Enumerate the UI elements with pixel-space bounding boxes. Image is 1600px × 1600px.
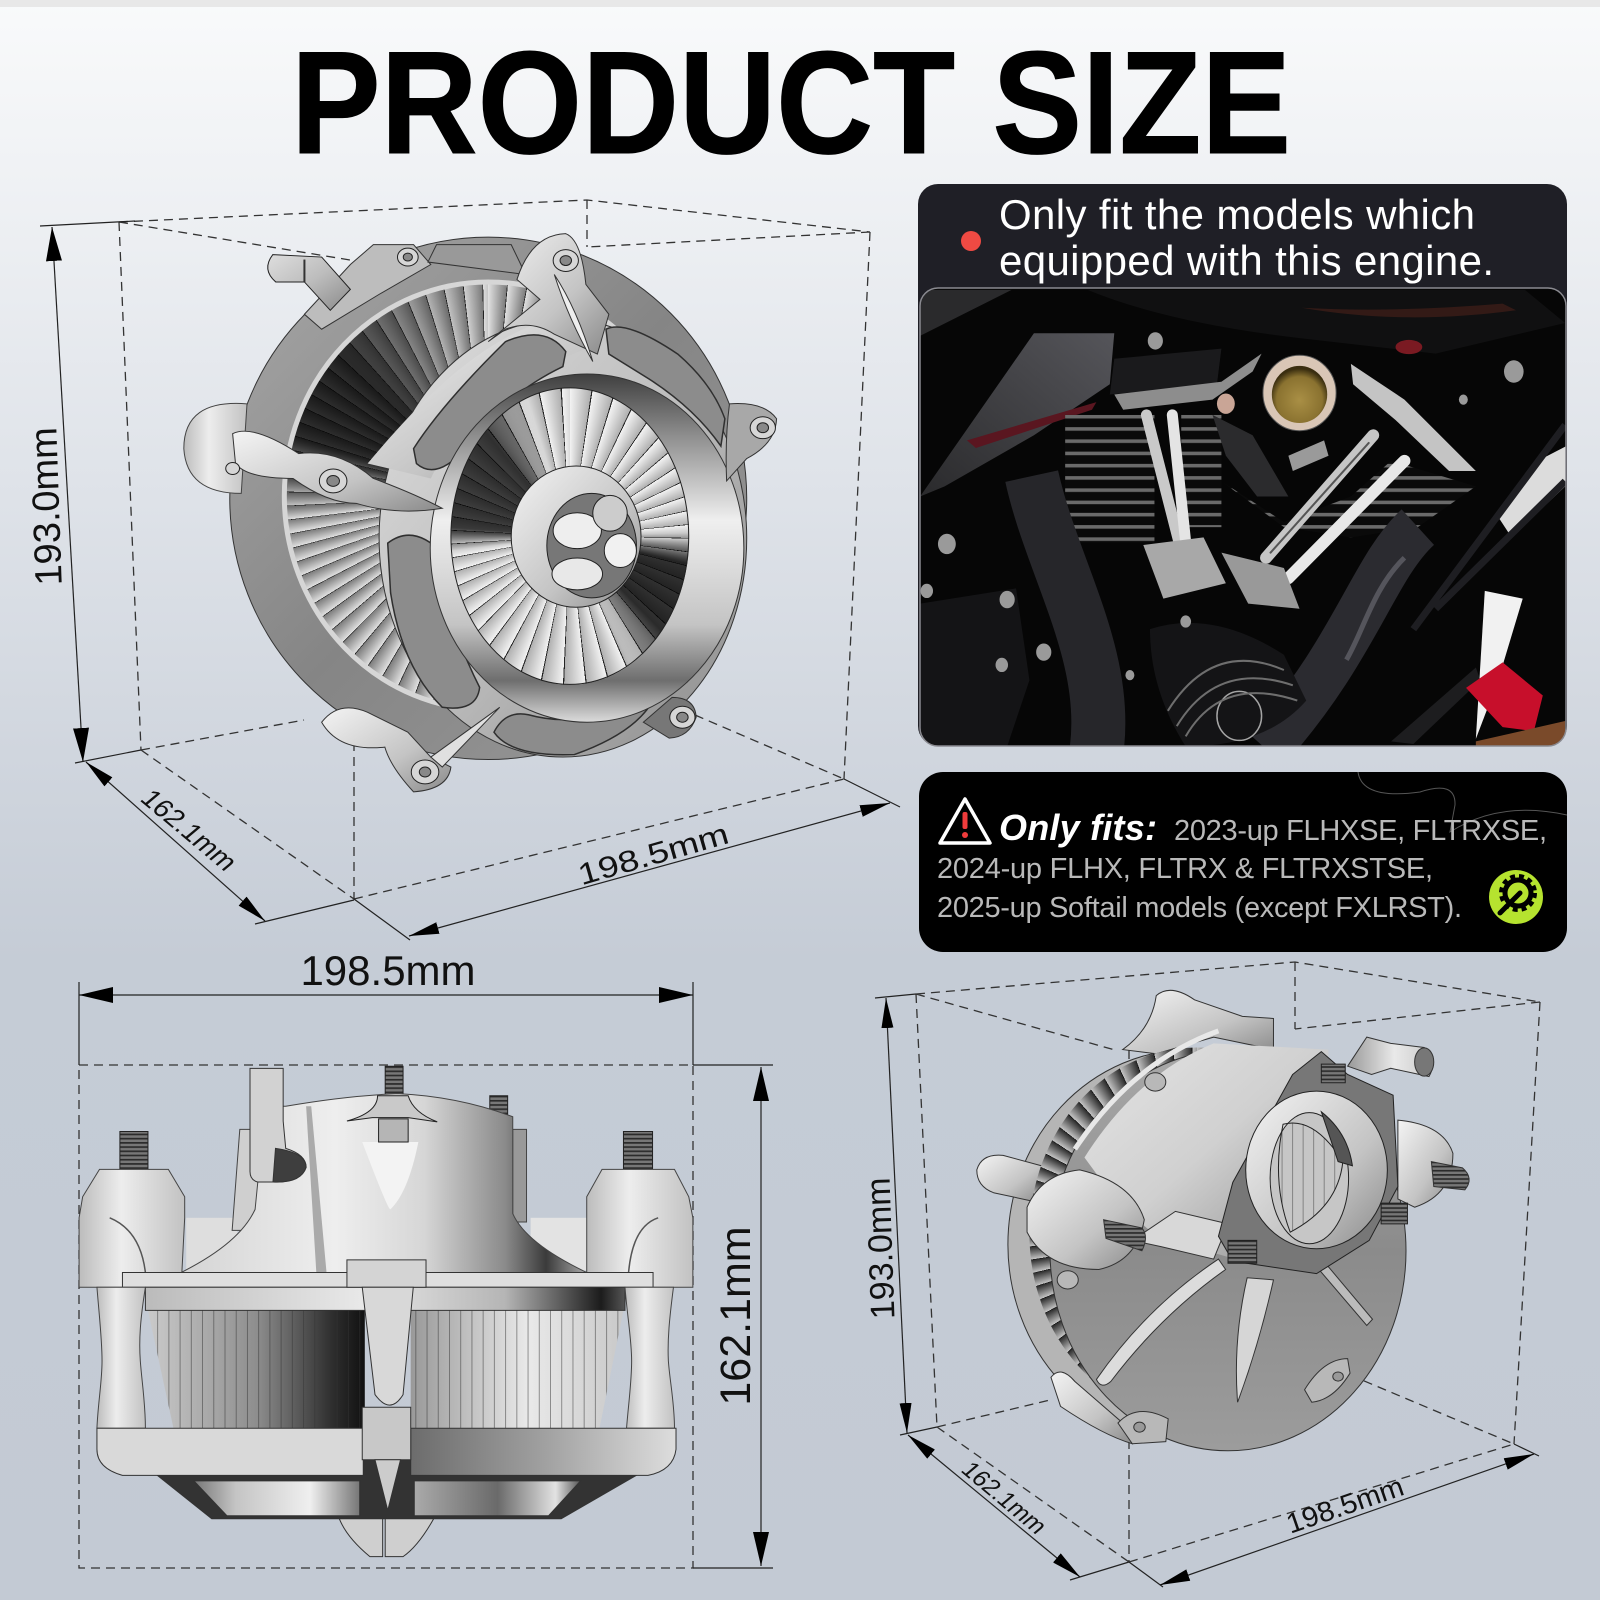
- compatible models text: [937, 815, 1547, 924]
- mounting posts: [79, 1169, 693, 1287]
- dimension: width 198.5mm: 198.5mm: [300, 947, 476, 994]
- dimension: depth 162.1mm: 162.1mm: [955, 1457, 1053, 1539]
- filter fins arc: [1029, 1048, 1364, 1421]
- diagram: rear perspective view: [860, 962, 1540, 1587]
- dimension: height 193.0mm: [860, 998, 907, 1433]
- left boss: [1027, 1170, 1145, 1269]
- icon: green gear and wrench: [1489, 870, 1543, 924]
- dimension: height 193.0mm: 193.0mm: [860, 1177, 902, 1320]
- bolts: [226, 248, 775, 784]
- hose barb: [268, 255, 350, 310]
- hose barb: [1348, 1037, 1434, 1077]
- label: only fits: Only fits:: [999, 807, 1157, 848]
- icon: warning triangle: [940, 799, 990, 843]
- dimension: depth 162.1mm: [86, 762, 265, 921]
- dome: [1084, 1043, 1328, 1257]
- bright ring: [430, 374, 744, 722]
- slot pockets: [388, 327, 739, 755]
- dimension: width 198.5mm: 198.5mm: [1282, 1471, 1408, 1540]
- dimension: depth 162.1mm: 162.1mm: [712, 1226, 760, 1406]
- engine photo: [920, 288, 1567, 752]
- product: air cleaner rear view: [977, 990, 1469, 1451]
- dimension: width 198.5mm: 198.5mm: [574, 818, 732, 892]
- dimension: width 198.5mm: [409, 803, 890, 936]
- dimension box: dashed cube: [40, 200, 900, 940]
- note text: [999, 191, 1494, 284]
- centre hub: [511, 466, 641, 607]
- product: air cleaner side view: [79, 1066, 693, 1557]
- panel: engine note with photo: [918, 184, 1567, 752]
- compatible models text: 2025-up Softail models (except FXLRST).: [937, 892, 1462, 924]
- mounting bumps: [1057, 1073, 1350, 1444]
- red foot peg: [1466, 662, 1543, 731]
- flange studs: [1228, 1064, 1407, 1263]
- note text: equipped with this engine.: [999, 237, 1494, 284]
- panel: only fits card: [919, 772, 1567, 952]
- dimension box: dashed cube: [875, 962, 1540, 1587]
- right boss: [1398, 1120, 1469, 1207]
- product: air cleaner front view: [184, 234, 777, 792]
- filter element: [148, 1310, 623, 1428]
- dimension: width 198.5mm: [1160, 1454, 1534, 1585]
- front plate: [379, 319, 747, 757]
- chrome pushrods: [1146, 415, 1404, 578]
- studs: [120, 1066, 653, 1169]
- radial fins opening: [451, 388, 689, 685]
- compatible models text: 2023-up FLHXSE, FLTRXSE,: [1174, 815, 1547, 847]
- throttle flange: [1218, 1052, 1398, 1274]
- central dome: [181, 1094, 587, 1273]
- bullet dot: [961, 231, 981, 251]
- legs: [97, 1287, 674, 1428]
- centre knob: [339, 1519, 434, 1557]
- throttle body: [1217, 355, 1336, 431]
- dimension: depth 162.1mm: [908, 1435, 1080, 1577]
- dimension: height 193.0mm: [23, 227, 83, 762]
- filter fins band: [284, 282, 692, 710]
- rear cover face: [1050, 1051, 1406, 1451]
- dimension: height 193.0mm: 193.0mm: [23, 427, 71, 586]
- ribs: [1096, 1259, 1373, 1402]
- arms: [977, 990, 1273, 1444]
- diagram: side view: [79, 947, 773, 1568]
- title: PRODUCT SIZE: [291, 21, 1291, 184]
- note text: Only fit the models which: [999, 191, 1475, 238]
- lower housing: [97, 1428, 676, 1519]
- dimension box: dashed rectangle: [79, 982, 773, 1568]
- mounting lobes: [233, 234, 777, 792]
- top tab: [347, 1096, 437, 1142]
- centre latch: [347, 1260, 426, 1510]
- dimension: depth 162.1mm: 162.1mm: [134, 784, 244, 876]
- compatible models text: 2024-up FLHX, FLTRX & FLTRXSTSE,: [937, 853, 1433, 885]
- flange and band: [122, 1273, 653, 1310]
- hose barb: [250, 1068, 306, 1182]
- diagram: front perspective view: [23, 200, 900, 940]
